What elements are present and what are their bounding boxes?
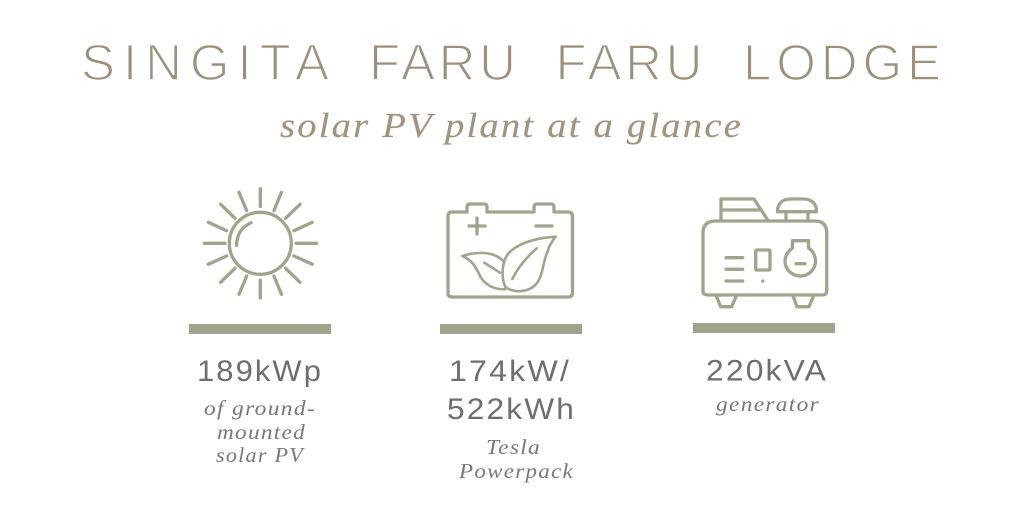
caption: of ground-mounted solar PV: of ground- <box>204 396 316 420</box>
panel: battery <box>440 204 582 483</box>
caption: of ground-mounted solar PV: solar PV <box>216 443 306 467</box>
divider bar <box>189 324 331 334</box>
caption: generator: generator <box>716 392 820 416</box>
caption: Tesla Powerpack: Powerpack <box>458 459 574 483</box>
panel: solar PV <box>189 188 331 467</box>
stat: 189kWp: 189kWp <box>197 355 323 388</box>
title: SINGITA <box>81 34 329 91</box>
title: LODGE <box>743 34 941 91</box>
stat: 220kVA: 220kVA <box>706 354 828 388</box>
caption: of ground-mounted solar PV <box>204 396 316 467</box>
title: FARU <box>556 34 702 91</box>
caption: Tesla Powerpack <box>458 435 574 483</box>
caption: Tesla Powerpack: Tesla <box>486 435 541 459</box>
stat: 174kW/522kWh: 522kWh <box>447 393 576 426</box>
divider bar <box>440 324 582 334</box>
panel: generator <box>693 199 835 416</box>
caption: of ground-mounted solar PV: mounted <box>217 420 306 444</box>
stat: 174kW/522kWh: 174kW/ <box>449 355 571 388</box>
title: FARU <box>369 34 516 91</box>
stat: 174kW/522kWh <box>447 355 576 426</box>
title <box>81 34 941 91</box>
icon: sun <box>204 188 316 298</box>
subtitle: solar PV plant at a glance <box>280 106 743 145</box>
icon: generator <box>703 199 827 307</box>
icon: battery with leaves <box>448 204 572 297</box>
divider bar <box>693 323 835 333</box>
